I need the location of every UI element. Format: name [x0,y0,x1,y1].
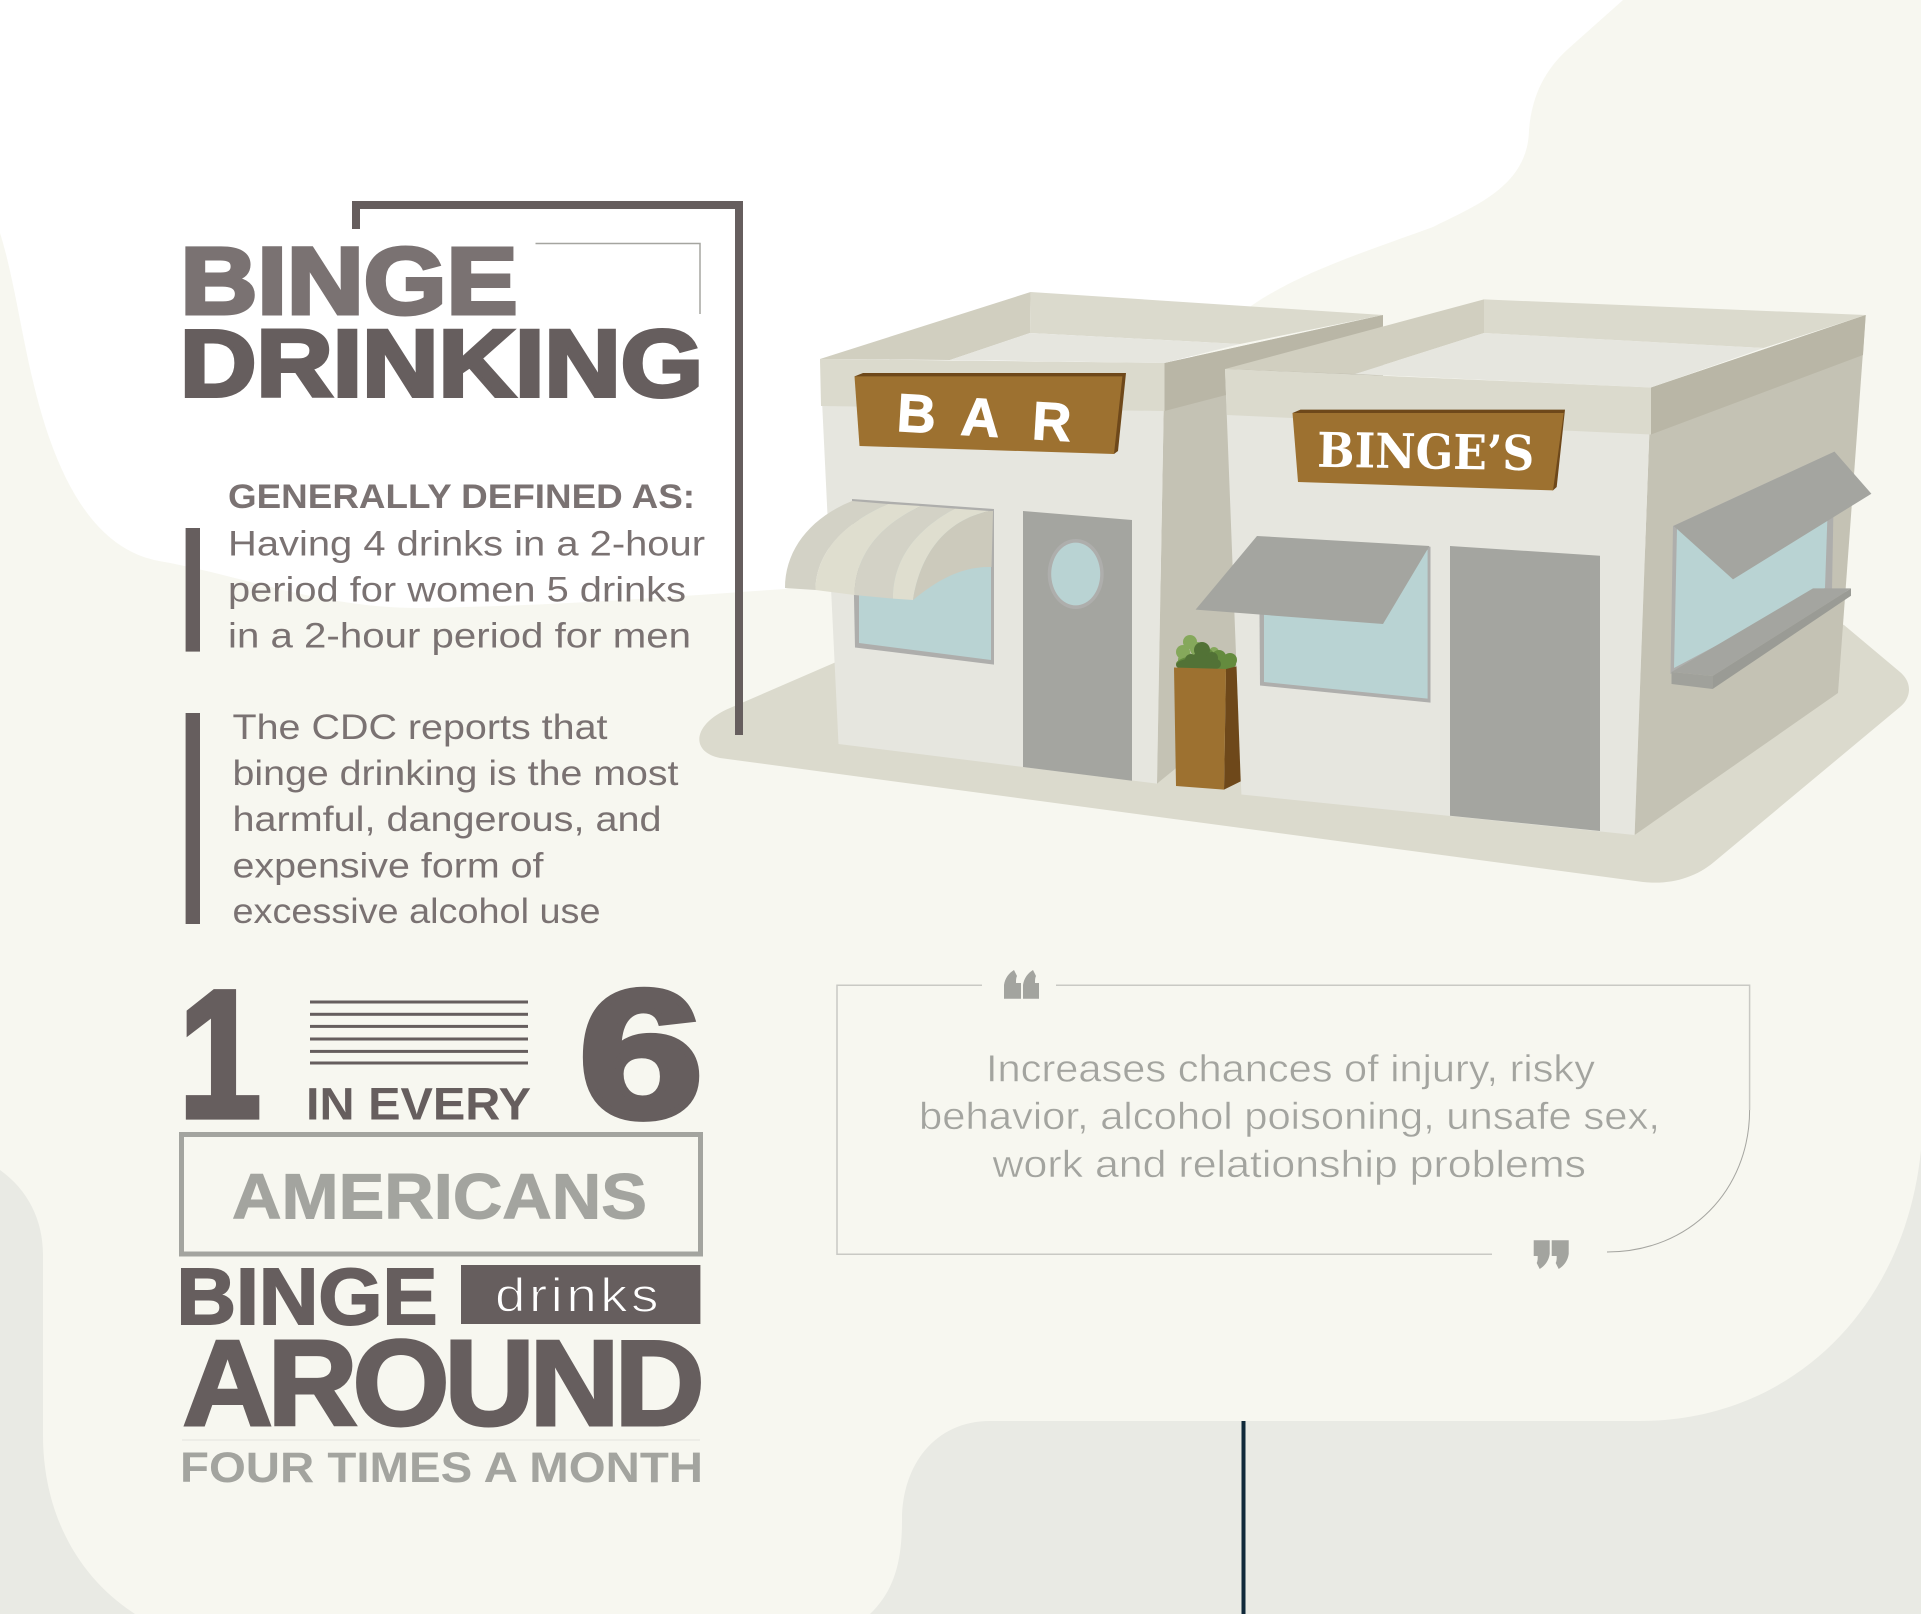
definition block: GENERALLY DEFINED AS: [228,478,695,516]
four times a month: FOUR TIMES A MONTH [180,1444,703,1492]
definition block [186,478,705,656]
binge's sign [1292,410,1565,490]
binge drinks line: BINGE [176,1252,438,1341]
CDC paragraph: binge drinking is the most [232,754,679,793]
background: grey right corner [870,1150,1921,1614]
bar sign [854,373,1126,454]
title: BINGE [180,228,518,334]
binge's side window [1670,452,1871,689]
icon: closing quote [1534,1240,1569,1269]
CDC paragraph: expensive form of [232,846,544,886]
around: AROUND [182,1315,700,1451]
binge drinks line [176,1252,700,1341]
definition block: in a 2-hour period for men [228,617,691,656]
bar striped awning [785,501,993,600]
CDC paragraph: The CDC reports that [232,708,608,747]
quote callout [837,970,1750,1269]
CDC paragraph: harmful, dangerous, and [232,800,662,839]
quote text: behavior, alcohol poisoning, unsafe sex, [919,1096,1660,1138]
binge's sign: BINGE’S [1317,423,1535,482]
binge's front window [1259,547,1430,703]
divider: navy vertical line [1242,1421,1246,1614]
heading frame [356,205,739,735]
statistic: 1 in every 6 [179,954,703,1156]
americans box [182,1134,700,1254]
binge's door [1450,546,1600,831]
definition block: period for women 5 drinks [228,570,686,610]
statistic: 1 in every 6: 1 [179,954,261,1156]
bar window [852,499,994,665]
CDC paragraph: excessive alcohol use [232,892,600,931]
background: grey left corner [0,1170,135,1614]
quote frame [837,985,1750,1254]
quote text: work and relationship problems [991,1144,1586,1186]
statistic: 1 in every 6: 6 [579,954,703,1156]
bar building [785,292,1383,784]
bar sign: BAR [895,383,1073,453]
quote text [919,1049,1660,1186]
illustration: bar buildings [699,292,1909,883]
americans box: AMERICANS [232,1161,647,1233]
definition block: Having 4 drinks in a 2-hour [228,525,705,564]
planter with shrub [1174,635,1241,790]
CDC paragraph [186,708,679,931]
icon: opening quote [1004,970,1039,999]
binge's building [1196,299,1871,835]
title: DRINKING [180,311,703,417]
binge drinks line: drinks [495,1268,662,1321]
title [180,228,703,417]
bar door [1023,511,1132,781]
ground shadow [699,500,1909,883]
binge's front awning [1196,536,1430,624]
quote text: Increases chances of injury, risky [986,1049,1595,1091]
statistic: 1 in every 6: IN EVERY [306,1079,531,1130]
